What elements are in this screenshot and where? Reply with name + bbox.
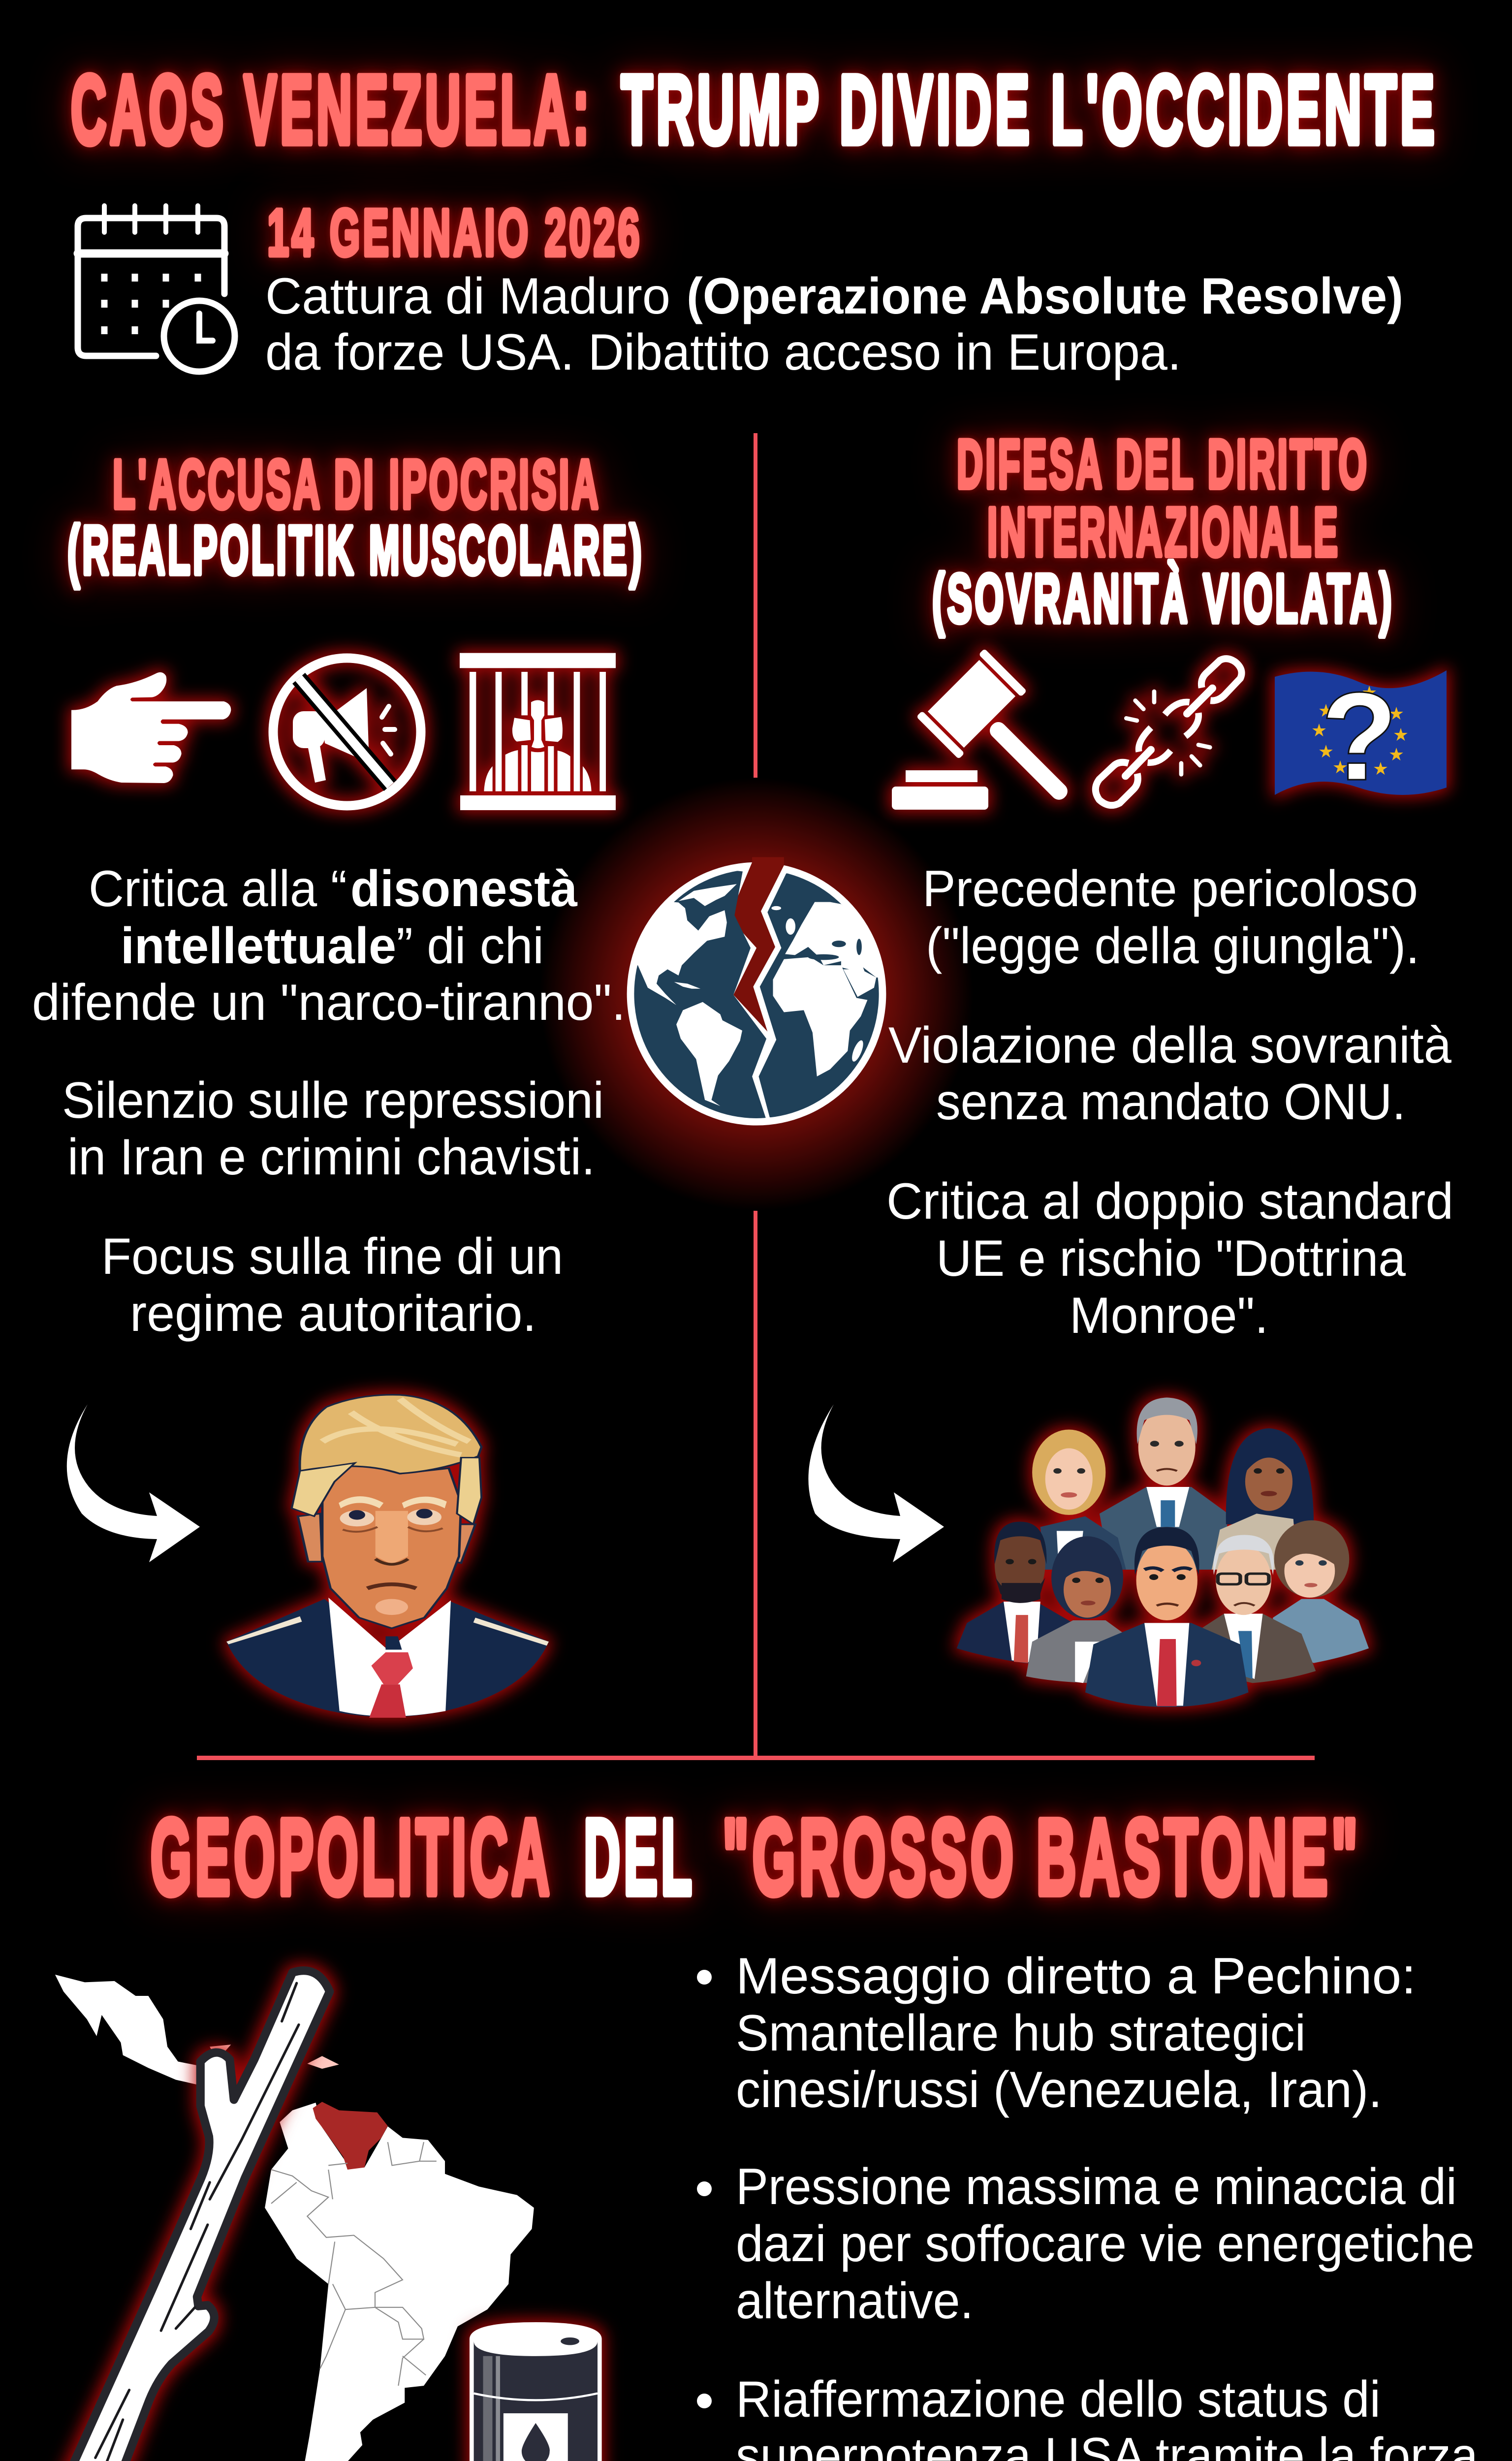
text block: geopolitics bullets: cinesi/russi (Venezuela, Iran). bbox=[736, 2061, 1382, 2118]
person: man with glasses bbox=[1201, 1535, 1316, 1683]
text block: right arguments: Violazione della sovranità bbox=[888, 1017, 1451, 1074]
text block: right arguments: UE e rischio "Dottrina bbox=[936, 1230, 1406, 1287]
panel: left heading bbox=[67, 445, 644, 589]
person: gray-haired man bbox=[1100, 1397, 1228, 1570]
text block: geopolitics bullets: Messaggio diretto a Pechino: bbox=[736, 1948, 1416, 2005]
date heading: 14 GENNAIO 2026 bbox=[267, 195, 642, 270]
intro text: Cattura di Maduro bbox=[265, 268, 670, 325]
icon: EU flag with question mark: ★ bbox=[1318, 741, 1334, 761]
text block: geopolitics bullets bbox=[697, 1948, 1478, 2461]
text block: geopolitics bullets: Smantellare hub strategici bbox=[736, 2005, 1306, 2062]
icon: gavel bbox=[892, 649, 1099, 831]
icon: EU flag with question mark: ★ bbox=[1388, 744, 1404, 764]
icon: EU flag with question mark: ★ bbox=[1388, 703, 1404, 724]
icon: EU flag with question mark: ? bbox=[1321, 666, 1398, 807]
person: man with beard bbox=[957, 1521, 1073, 1666]
text block: left arguments: difende un "narco-tiranno". bbox=[32, 974, 626, 1031]
text block: right arguments bbox=[886, 860, 1453, 1344]
intro text: (Operazione Absolute Resolve) bbox=[687, 268, 1403, 325]
illustration: Trump portrait bbox=[226, 1395, 549, 1718]
text block: left arguments: in Iran e crimini chavisti. bbox=[67, 1129, 595, 1186]
text block: geopolitics bullets: Pressione massima e minaccia di bbox=[736, 2158, 1457, 2215]
section heading: Geopolitica bbox=[151, 1798, 1361, 1917]
arrow: left curved bbox=[67, 1404, 200, 1562]
intro text: da forze USA. Dibattito acceso in Europa. bbox=[265, 324, 1181, 381]
icon: prisoner behind bars bbox=[460, 653, 616, 810]
divider: horizontal bbox=[197, 1756, 1315, 1760]
icon: EU flag with question mark: ★ bbox=[1311, 720, 1327, 740]
icon: EU flag with question mark: ★ bbox=[1361, 682, 1377, 702]
text block: left arguments: Critica alla “ bbox=[89, 860, 347, 917]
person: woman in gray suit bbox=[1026, 1536, 1124, 1683]
panel: left heading: (REALPOLITIK MUSCOLARE) bbox=[67, 511, 644, 589]
icon: banned megaphone bbox=[273, 658, 421, 806]
text block: right arguments: Monroe". bbox=[1070, 1287, 1268, 1344]
map: Latin America bbox=[55, 1975, 534, 2461]
text block: left arguments: Silenzio sulle repressioni bbox=[62, 1072, 604, 1129]
text block: geopolitics bullets: dazi per soffocare vie energetiche bbox=[736, 2215, 1475, 2272]
arrow: right curved bbox=[808, 1404, 944, 1562]
icon: EU flag with question mark bbox=[1275, 666, 1447, 807]
divider: vertical upper bbox=[754, 433, 757, 829]
section heading: Geopolitica: DEL bbox=[584, 1798, 695, 1917]
icon: cracked globe bbox=[627, 857, 898, 1126]
section heading: Geopolitica: GEOPOLITICA bbox=[151, 1798, 553, 1917]
text block: right arguments: senza mandato ONU. bbox=[936, 1073, 1406, 1131]
person: central man with red tie bbox=[1085, 1527, 1249, 1707]
text block: geopolitics bullets: alternative. bbox=[736, 2272, 974, 2330]
person: dark-haired woman bbox=[1212, 1428, 1314, 1570]
icon: big stick bbox=[59, 1971, 330, 2461]
icon: EU flag with question mark: ★ bbox=[1332, 757, 1348, 777]
icon: oil barrel bbox=[470, 2322, 602, 2461]
glow behind globe bbox=[540, 778, 973, 1211]
icon: EU flag with question mark: ★ bbox=[1318, 700, 1334, 721]
text block: left arguments: Focus sulla fine di un bbox=[101, 1228, 563, 1285]
text block: right arguments: Precedente pericoloso bbox=[922, 860, 1418, 917]
text block: left arguments: ” di chi bbox=[396, 917, 544, 975]
title: CAOS VENEZUELA: bbox=[71, 55, 593, 164]
icon: EU flag with question mark: ★ bbox=[1373, 758, 1388, 779]
text block: left arguments: disonestà bbox=[350, 860, 578, 917]
icon: pointing hand bbox=[71, 672, 231, 783]
icon: EU flag with question mark: ★ bbox=[1393, 725, 1409, 745]
text block: left arguments bbox=[32, 860, 626, 1342]
panel: left heading: L'ACCUSA DI IPOCRISIA bbox=[113, 445, 601, 523]
intro text bbox=[265, 268, 1403, 381]
person: blonde woman bbox=[1032, 1429, 1126, 1570]
text block: geopolitics bullets: Riaffermazione dello status di bbox=[736, 2371, 1381, 2428]
illustration: group of people bbox=[957, 1397, 1369, 1707]
text block: right arguments: ("legge della giungla"). bbox=[926, 917, 1419, 975]
text block: right arguments: Critica al doppio standard bbox=[886, 1173, 1453, 1230]
text block: left arguments: intellettuale bbox=[121, 917, 396, 975]
icon: broken chain bbox=[1096, 659, 1242, 805]
text block: left arguments: regime autoritario. bbox=[130, 1285, 536, 1342]
icon: calendar with clock bbox=[78, 206, 235, 372]
panel: right heading bbox=[932, 425, 1394, 637]
person: brown-haired woman bbox=[1273, 1520, 1369, 1663]
divider: vertical lower bbox=[754, 1161, 757, 1758]
